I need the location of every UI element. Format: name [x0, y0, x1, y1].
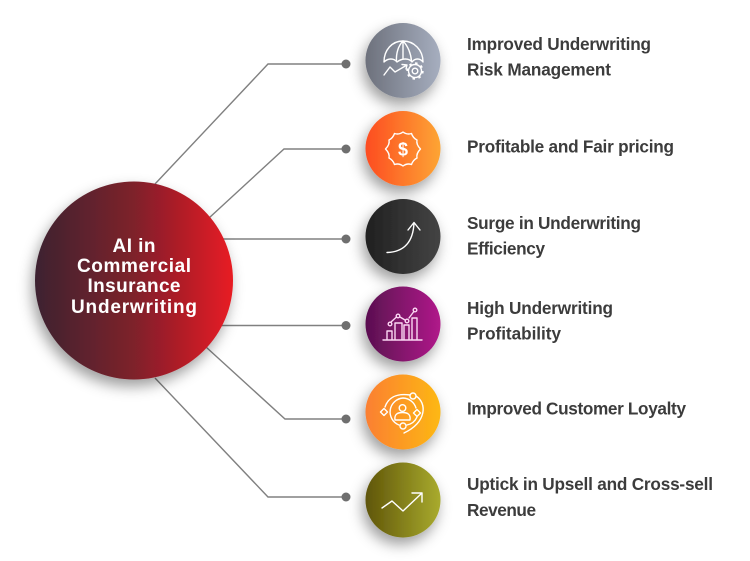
item: Improved Underwriting Risk Management: [366, 23, 651, 98]
label: Improved Underwriting: [467, 34, 651, 54]
central title: Underwriting: [71, 297, 197, 318]
label: Revenue: [467, 500, 536, 520]
item: Uptick in Upsell and Cross-sell Revenue: [366, 462, 713, 538]
icon: curved arrow: [387, 222, 420, 252]
icon: dollar badge: $: [398, 140, 408, 160]
item: Profitable and Fair pricing: [366, 111, 674, 186]
connector: loyalty: [206, 347, 350, 424]
connector: risk management: [155, 60, 350, 184]
label: Surge in Underwriting: [467, 213, 641, 233]
central title: Commercial: [77, 256, 191, 277]
connector: revenue: [155, 378, 350, 502]
icon: umbrella with chart and gear: [384, 41, 423, 79]
label: Uptick in Upsell and Cross-sell: [467, 474, 713, 494]
connector: pricing: [209, 144, 350, 218]
icon: customer loop: [380, 393, 423, 433]
label: Profitable and Fair pricing: [467, 136, 674, 156]
central title: AI in: [112, 236, 156, 257]
label: High Underwriting: [467, 298, 613, 318]
item: Improved Customer Loyalty: [366, 374, 686, 450]
central circle: [35, 182, 233, 380]
label: Profitability: [467, 324, 561, 344]
label: Improved Customer Loyalty: [467, 398, 686, 418]
central title: Insurance: [88, 276, 180, 297]
label: Risk Management: [467, 60, 611, 80]
connector: profitability: [220, 321, 350, 330]
icon: bar chart with line: [383, 308, 422, 340]
item: High Underwriting Profitability: [366, 286, 613, 362]
item: Surge in Underwriting Efficiency: [366, 199, 641, 274]
connector: efficiency: [223, 234, 350, 244]
label: Efficiency: [467, 238, 545, 258]
icon: zigzag trend arrow: [382, 493, 422, 511]
icon: dollar badge: [386, 132, 420, 166]
